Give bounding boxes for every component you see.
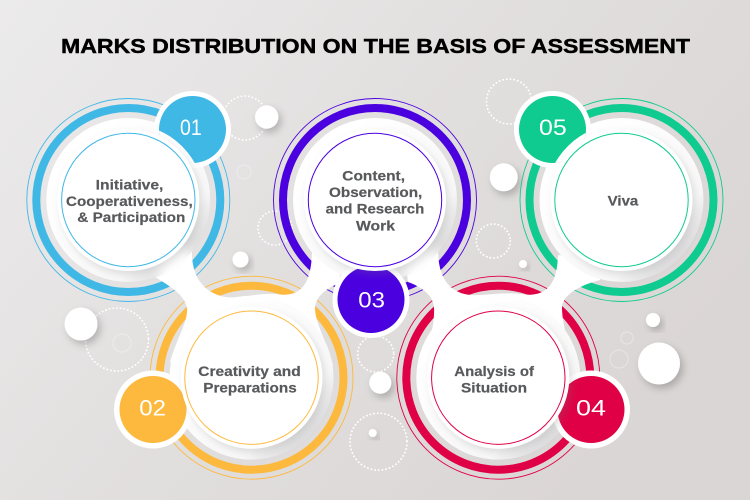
badge 01 xyxy=(154,91,231,168)
panel: disc 4: Situation xyxy=(461,381,527,396)
badge numbers: 03 xyxy=(358,288,385,313)
panel: disc 4: Analysis of xyxy=(454,364,535,379)
panel: disc 3: and Research xyxy=(326,202,424,217)
badge 04 xyxy=(552,370,630,448)
panel: disc 3: Content, xyxy=(342,169,405,184)
panel: disc 1: & Participation xyxy=(77,210,185,225)
badge 03 xyxy=(332,261,410,338)
panel: disc 3: Work xyxy=(356,219,396,234)
panel: disc 3: Observation, xyxy=(329,185,422,200)
panel: disc 1: Initiative, xyxy=(96,177,163,192)
badge numbers: 01 xyxy=(180,115,202,140)
panel: disc 1 xyxy=(57,129,199,271)
badge 02 xyxy=(114,370,192,448)
panel: disc 5: Viva xyxy=(608,194,639,209)
badge numbers: 05 xyxy=(539,115,567,140)
panel: disc 5 xyxy=(550,129,692,271)
badge numbers: 04 xyxy=(576,396,606,421)
decorative dotted and white circles xyxy=(64,79,680,470)
connector: discs 1 and 3 to disc 2 xyxy=(155,250,345,400)
panel: disc 2: Preparations xyxy=(203,381,297,396)
connector junction blends xyxy=(156,246,442,286)
badge numbers: 02 xyxy=(139,396,166,421)
panel: disc 1: Cooperativeness, xyxy=(66,194,193,209)
panel: disc 2: Creativity and xyxy=(198,364,301,379)
badge numbers xyxy=(139,115,606,421)
outer discs xyxy=(46,118,704,460)
connector: discs 3 and 5 to disc 4 xyxy=(405,250,600,400)
badge cut-outs for discs 1 and 5 xyxy=(159,130,586,163)
panel: disc 2 xyxy=(180,307,322,449)
coloured rings xyxy=(27,98,723,479)
title: MARKS DISTRIBUTION ON THE BASIS OF ASSESSMENT xyxy=(61,35,691,58)
panel: disc 4 xyxy=(427,307,569,449)
badge 05 xyxy=(514,91,591,168)
panel: disc 3 xyxy=(304,129,446,271)
